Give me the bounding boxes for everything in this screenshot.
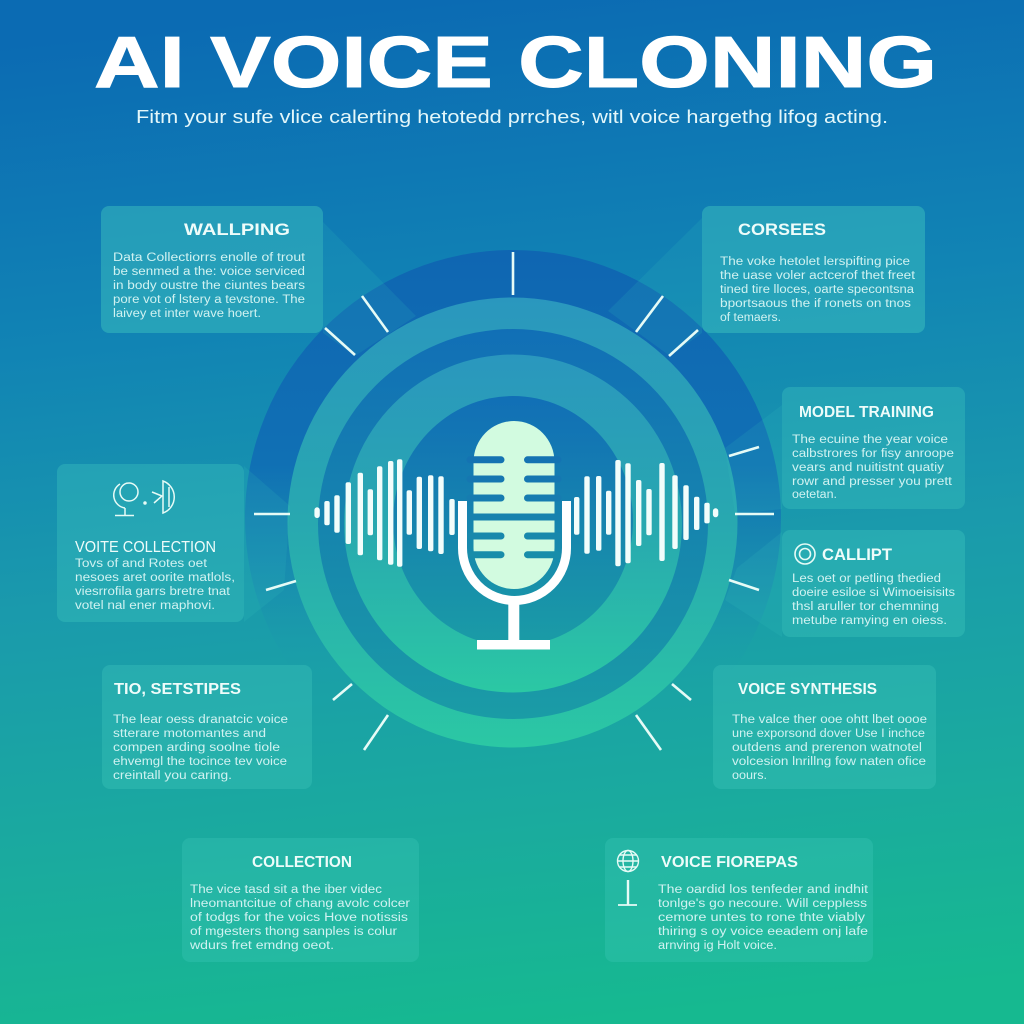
heading: voice fiorepas: VOICE FIOREPAS <box>661 854 798 871</box>
panel: wallping <box>101 206 323 333</box>
connector beams <box>244 218 782 637</box>
heading: voite collection: VOITE COLLECTION <box>75 539 216 556</box>
text block: collection: The vice tasd sit a the iber videc <box>190 884 382 896</box>
text block: wallping: in body oustre the ciuntes bears <box>113 280 305 292</box>
text block: model training: rowr and presser you prett <box>792 476 953 488</box>
text block: voice fiorepas: arnving ig Holt voice. <box>658 940 777 952</box>
subtitle: Fitm your sufe vlice calerting hetotedd prrches, witl voice hargethg lifog acting. <box>136 106 888 127</box>
text block: model training: oetetan. <box>792 489 837 501</box>
heading: tio setstipes: TIO, SETSTIPES <box>114 681 241 698</box>
title: AI VOICE CLONING <box>94 23 937 103</box>
concentric circle backdrop <box>245 250 781 786</box>
text block: collection: wdurs fret emdng oeot. <box>189 940 334 952</box>
text block: voice fiorepas: thiring s oy voice eeadem onj lafe <box>658 926 868 938</box>
panel: collection <box>182 838 419 962</box>
panel: voice synthesis <box>713 665 936 789</box>
text block: corsees: The voke hetolet lerspifting pice <box>720 256 910 268</box>
text block: voite collection: Tovs of and Rotes oet <box>75 558 208 570</box>
text block: voice fiorepas: The oardid los tenfeder and indhit <box>658 884 869 896</box>
text block: model training: calbstrores for fisy anroope <box>792 448 954 460</box>
text block: voite collection: nesoes aret oorite matlols, <box>75 572 235 584</box>
microphone head <box>470 421 558 589</box>
text block: voice synthesis: The valce ther ooe ohtt lbet oooe <box>732 714 927 726</box>
panel: tio setstipes <box>102 665 312 789</box>
text block: tio setstipes: compen arding soolne tiole <box>113 742 280 754</box>
microphone stem <box>508 604 519 641</box>
text block: callipt: thsl aruller tor chemning <box>792 601 939 613</box>
text block: corsees: bportsaous the if ronets on tnos <box>720 298 911 310</box>
text block: voice synthesis: volcesion lnrillng fow naten ofice <box>732 756 926 768</box>
text block: voice fiorepas: cemore untes to rone thte viably <box>658 912 865 924</box>
microphone cradle <box>462 501 566 601</box>
text block: tio setstipes <box>113 714 288 782</box>
text block: voice synthesis: outdens and prerenon watnotel <box>732 742 922 754</box>
text block: voite collection: viesrrofila garrs bretre tnat <box>75 586 231 598</box>
icon: globe on stand <box>618 850 638 905</box>
text block: wallping <box>113 252 306 320</box>
text block: wallping: pore vot of lstery a tevstone. The <box>113 294 305 306</box>
text block: callipt <box>792 573 955 627</box>
text block: callipt: Les oet or petling thedied <box>792 573 941 585</box>
sound wave <box>314 459 718 567</box>
microphone base <box>477 640 550 650</box>
radial tick marks <box>254 252 774 750</box>
text block: collection: lneomantcitue of chang avolc colcer <box>190 898 410 910</box>
text block: collection: of todgs for the voics Hove notissis <box>190 912 408 924</box>
text block: model training: The ecuine the year voice <box>792 434 948 446</box>
icon: ring <box>795 544 815 564</box>
panel: callipt <box>782 530 965 637</box>
heading: voice synthesis: VOICE SYNTHESIS <box>738 681 877 698</box>
icon: globe and speaker <box>114 481 174 516</box>
text block: model training: vears and nuitistnt quatiy <box>792 462 944 474</box>
text block: tio setstipes: The lear oess dranatcic voice <box>113 714 288 726</box>
text block: tio setstipes: ehvemgl the tocince tev voice <box>113 756 287 768</box>
heading: corsees: CORSEES <box>738 220 826 239</box>
text block: wallping: be senmed a the: voice serviced <box>113 266 305 278</box>
text block: corsees: the uase voler actcerof thet freet <box>720 270 916 282</box>
panel: model training <box>782 387 965 509</box>
heading: wallping: WALLPING <box>184 220 290 239</box>
text block: voice synthesis: une exporsond dover Use I inchce <box>732 728 925 740</box>
text block: model training <box>792 434 954 501</box>
panel: corsees <box>702 206 925 333</box>
text block: wallping: Data Collectiorrs enolle of trout <box>113 252 306 264</box>
text block: callipt: doeire esiloe si Wimoeisisits <box>792 587 955 599</box>
heading: collection: COLLECTION <box>252 854 352 871</box>
text block: voice fiorepas: tonlge's go necoure. Will ceppless <box>658 898 867 910</box>
panel: voice fiorepas <box>605 838 873 962</box>
text block: corsees: of temaers. <box>720 312 781 324</box>
heading: model training: MODEL TRAINING <box>799 404 934 421</box>
text block: tio setstipes: creintall you caring. <box>113 770 232 782</box>
text block: voice fiorepas <box>658 884 869 952</box>
text block: wallping: laivey et inter wave hoert. <box>113 308 261 320</box>
text block: collection: of mgesters thong sanples is colur <box>190 926 397 938</box>
text block: collection <box>189 884 410 952</box>
text block: callipt: metube ramying en oiess. <box>792 615 947 627</box>
text block: corsees: tined tire lloces, oarte specontsna <box>720 284 915 296</box>
panel: voite collection <box>57 464 244 622</box>
text block: voice synthesis <box>732 714 927 782</box>
heading: callipt: CALLIPT <box>822 545 893 564</box>
text block: tio setstipes: stterare motomantes and <box>113 728 266 740</box>
text block: corsees <box>720 256 916 324</box>
text block: voite collection: votel nal ener maphovi. <box>75 600 215 612</box>
icon: microphone <box>462 421 566 650</box>
text block: voite collection <box>75 558 235 612</box>
text block: voice synthesis: oours. <box>732 770 767 782</box>
